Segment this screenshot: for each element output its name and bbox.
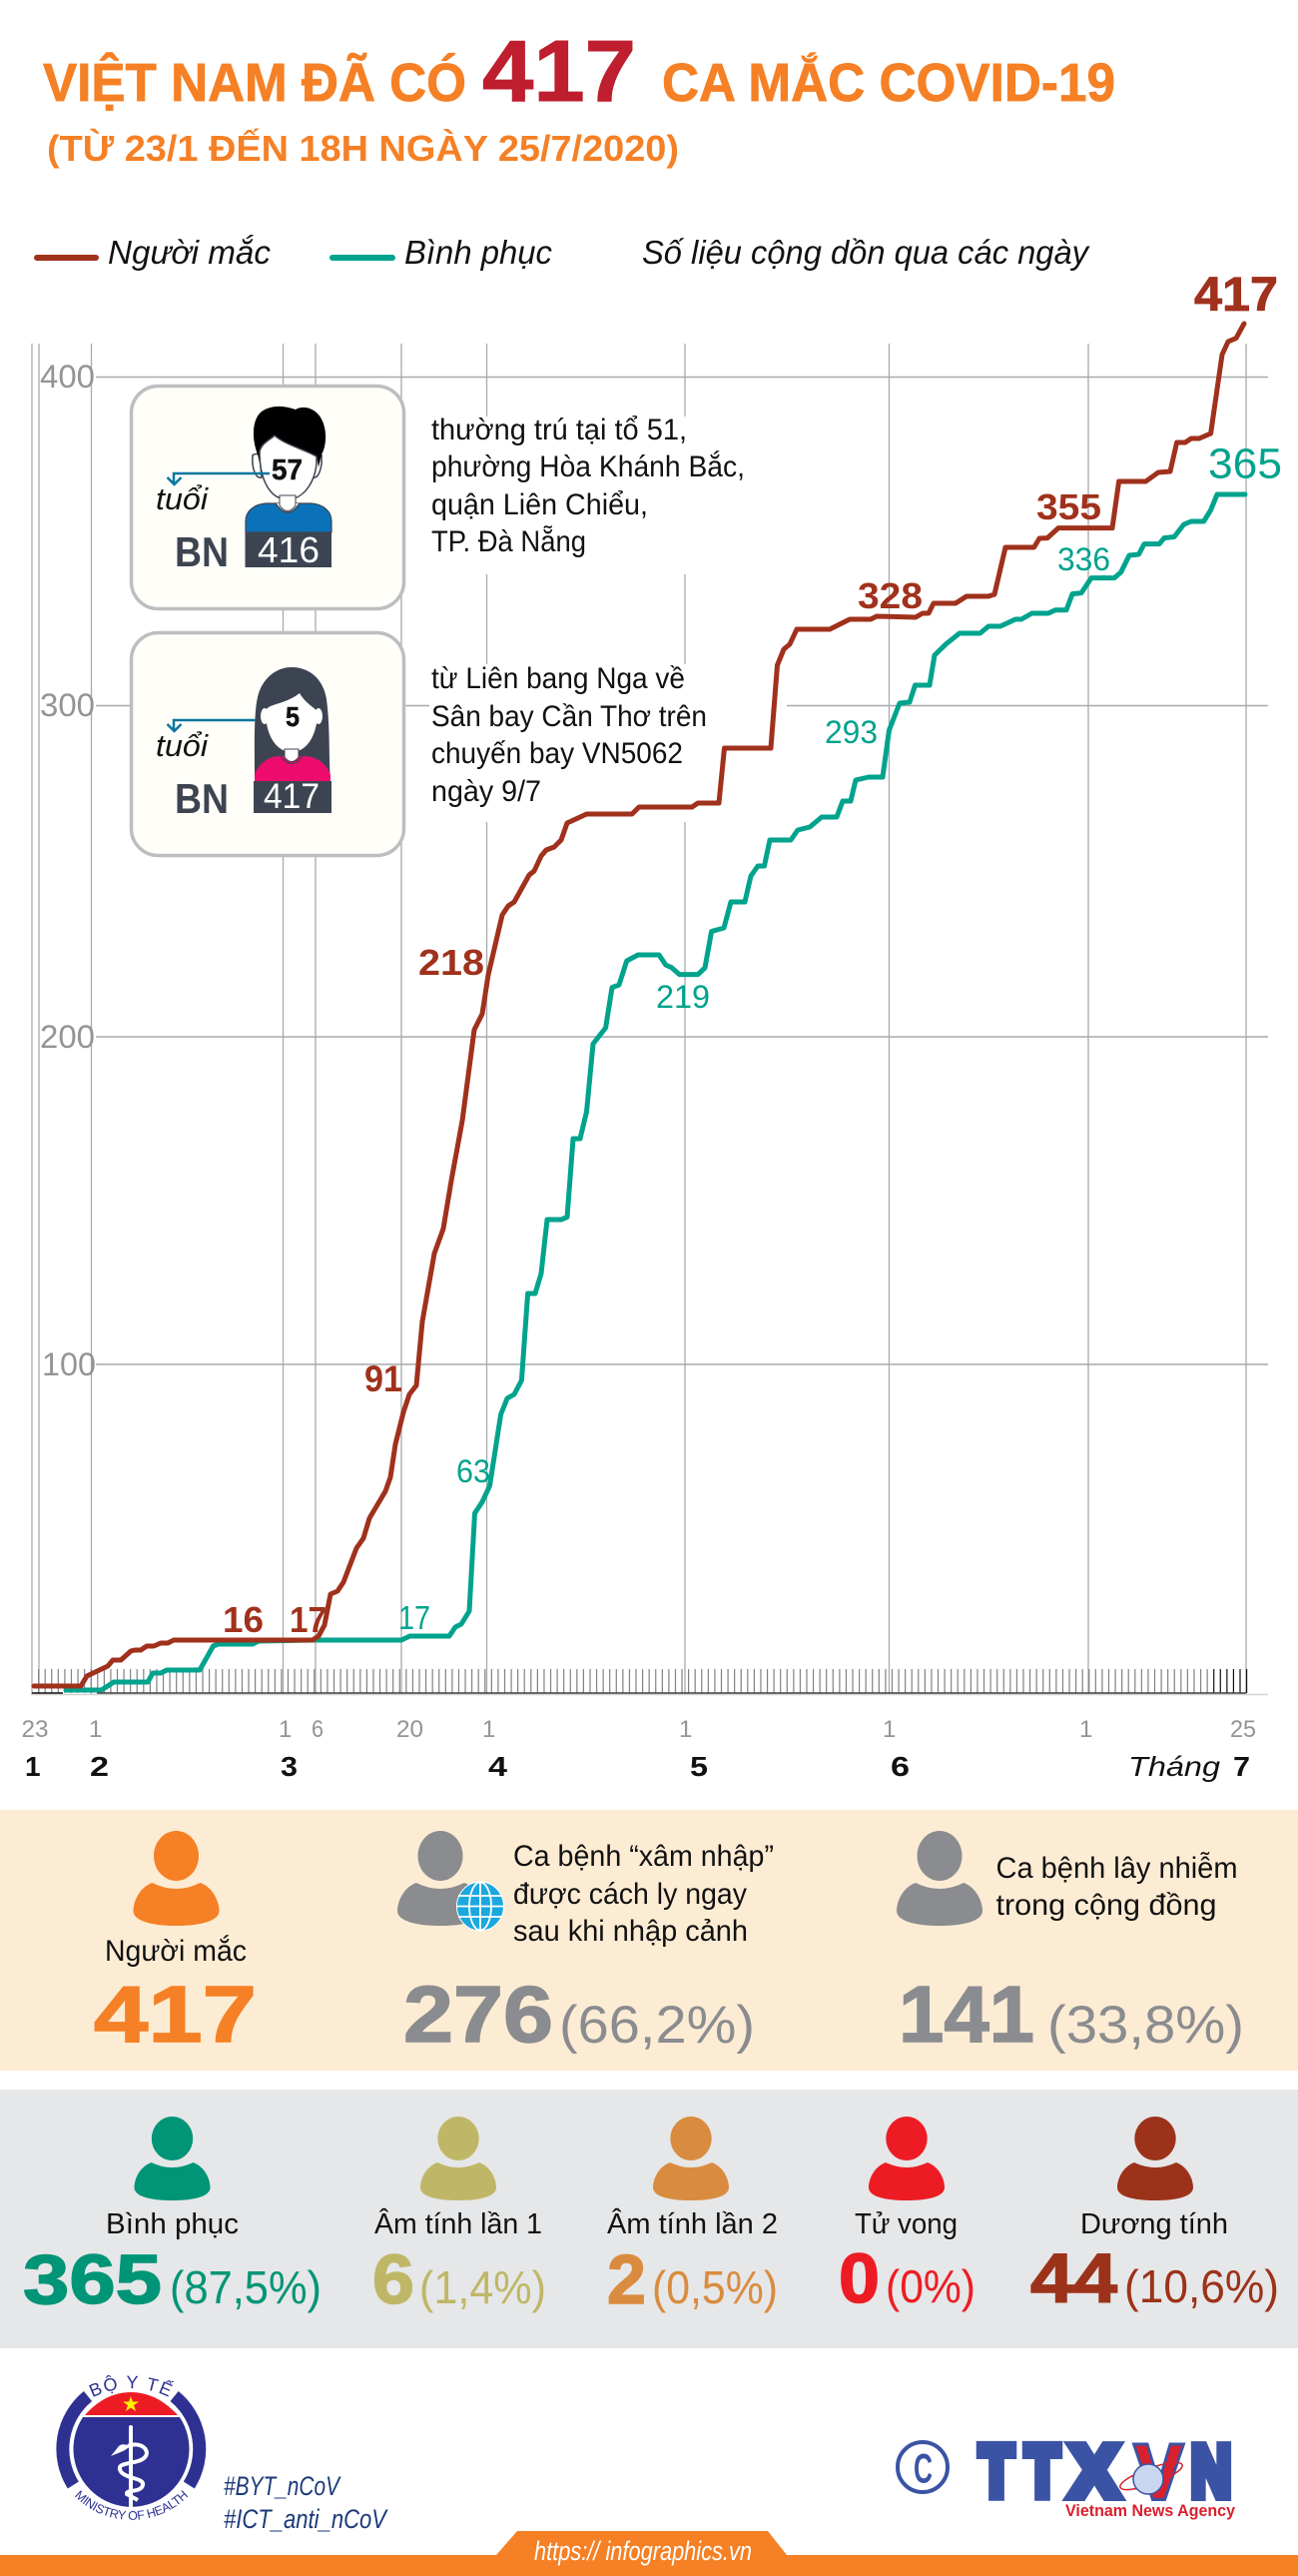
patient number 416 [246,529,331,570]
x axis month labels: 2 [90,1751,109,1782]
community cases description [996,1852,1238,1922]
arrow to age label [168,473,270,484]
imported count: (66,2%) [559,1996,755,2055]
y axis labels [40,359,96,1382]
confirmed value labels: 355 [1036,486,1101,527]
logo: TTXVN: Vietnam News Agency [1065,2501,1236,2520]
y axis labels: 200 [40,1019,95,1055]
title [43,23,1115,120]
logo: TTXVN: X [1070,2432,1118,2512]
confirmed value labels: 16 [223,1599,264,1640]
x axis day labels: 1 [89,1716,102,1743]
community cases description: Ca bệnh lây nhiễm [996,1852,1238,1885]
patient card BN 417 [132,633,403,855]
logo: TTXVN: T [1025,2432,1059,2512]
outcome: still positive: 44 [1030,2239,1117,2317]
note for BN 417: Sân bay Cần Thơ trên [431,700,707,733]
confirmed value labels: 417 [1194,269,1278,322]
icon: male patient [246,407,331,532]
confirmed value labels: 17 [290,1599,326,1640]
x axis month labels [25,1751,1250,1782]
footer bar [0,2531,1298,2576]
x axis day labels: 1 [279,1716,292,1743]
outcome: negative once: Âm tính lần 1 [374,2207,542,2240]
age 57: 57 [272,454,303,486]
x axis day labels: 1 [482,1716,495,1743]
outcome: deaths: 0 [839,2239,880,2317]
y axis labels: 400 [40,359,95,395]
recovered value labels: 63 [456,1453,490,1489]
imported cases description: Ca bệnh “xâm nhập” [513,1840,774,1873]
imported count: 276 [403,1970,553,2059]
logo: TTXVN: N [1191,2432,1231,2512]
community count: 141 [899,1970,1034,2059]
x axis day labels: 23 [22,1716,48,1743]
age unit: tuổi [156,481,209,516]
note for BN 416: thường trú tại tổ 51, [431,414,687,446]
outcome: negative twice: (0,5%) [652,2261,778,2313]
chart legend: Số liệu cộng dồn qua các ngày [642,234,1090,271]
title: 417 [482,23,636,120]
outcome: negative twice: Âm tính lần 2 [607,2207,778,2240]
outcome: deaths: (0%) [886,2260,975,2312]
total 417: 417 [94,1970,257,2059]
recovered value labels: 219 [656,979,710,1015]
recovered value labels: 17 [398,1599,430,1636]
logo: TTXVN: V [1135,2430,1182,2515]
age unit: tuổi [156,728,209,763]
patient number 416: 416 [258,529,320,570]
note for BN 417 [431,662,707,808]
x axis month labels: 6 [891,1751,910,1782]
x axis day labels: 1 [679,1716,692,1743]
outcome: deaths [839,2117,975,2317]
community count: (33,8%) [1047,1996,1244,2055]
hashtags: #BYT_nCoV [224,2471,341,2501]
logo: ministry of health [56,2375,206,2520]
outcome: negative once: (1,4%) [419,2261,546,2313]
confirmed value labels: 328 [858,575,923,616]
community cases description: trong cộng đồng [996,1889,1216,1922]
icon: person with globe [397,1831,503,1931]
logo: TTXVN [898,2430,1236,2520]
patient code BN: BN [175,528,229,575]
outcome: recovered [23,2117,322,2318]
outcome: recovered: (87,5%) [170,2261,322,2313]
y axis labels: 300 [40,687,95,723]
recovered value labels: 293 [825,714,878,750]
panel: outcomes [0,2090,1298,2348]
hashtags: #ICT_anti_nCoV [224,2504,388,2534]
imported cases description [513,1840,774,1948]
age 5: 5 [286,701,300,732]
white masks behind note text [429,417,787,822]
x axis month labels: 1 [25,1751,41,1782]
x axis day labels [22,1716,1256,1743]
patient card BN 416 [132,386,403,609]
outcome: negative once: 6 [372,2240,414,2318]
outcome: recovered: Bình phục [106,2208,239,2240]
x axis month labels: 7 [1233,1751,1250,1782]
outcome: still positive: Dương tính [1080,2208,1228,2240]
confirmed value labels [223,269,1278,1640]
outcome: still positive: (10,6%) [1124,2260,1279,2312]
chart legend [37,234,1090,271]
x axis month labels: 3 [281,1751,298,1782]
outcome: negative once [372,2117,546,2318]
patient number 417: 417 [264,777,320,816]
logo: ministry of health: BỘ Y TẾ [89,2375,174,2397]
note for BN 417: ngày 9/7 [431,775,541,808]
outcome: negative twice [607,2117,778,2318]
imported cases description: sau khi nhập cảnh [513,1915,748,1948]
recovered value labels: 365 [1208,440,1282,488]
outcome: recovered: 365 [23,2240,162,2318]
icon: person orange [134,1831,220,1926]
footer bar: https:// infographics.vn [534,2536,752,2566]
x axis day labels: 20 [396,1716,423,1743]
x axis day labels: 1 [883,1716,896,1743]
note for BN 416 [431,414,745,558]
confirmed cases line [34,324,1244,1686]
x axis day labels: 25 [1230,1716,1256,1743]
logo: ministry of health: MINISTRY OF HEALTH [75,2490,188,2520]
y axis labels: 100 [42,1346,96,1382]
panel: total cases [0,1810,1298,2071]
x axis day labels: 1 [1079,1716,1092,1743]
icon: female patient [255,667,330,781]
x axis month labels: Tháng [1128,1751,1220,1782]
confirmed value labels: 218 [418,942,484,983]
logo: TTXVN: T [979,2432,1013,2512]
subtitle: (TỪ 23/1 ĐẾN 18H NGÀY 25/7/2020) [47,127,679,169]
outcome: negative twice: 2 [607,2240,646,2318]
icon: person grey [897,1831,982,1926]
note for BN 416: TP. Đà Nẵng [431,525,586,558]
recovered value labels: 336 [1057,541,1110,577]
title: VIỆT NAM ĐÃ CÓ [43,52,466,113]
imported cases description: được cách ly ngay [513,1878,747,1911]
label: infected: Người mắc [105,1935,247,1968]
outcome: still positive [1030,2117,1279,2317]
patient code BN: BN [175,775,229,822]
x axis ticks [32,1681,1268,1694]
arrow to age label [168,720,256,731]
note for BN 416: phường Hòa Khánh Bắc, [431,450,745,483]
x axis month labels: 5 [690,1751,708,1782]
outcome: deaths: Tử vong [855,2208,958,2240]
community count [899,1970,1244,2059]
x axis month labels: 4 [488,1751,508,1782]
note for BN 417: chuyến bay VN5062 [431,737,683,770]
chart gridlines [32,344,1268,1695]
logo: TTXVN: C [914,2445,933,2491]
note for BN 416: quận Liên Chiểu, [431,488,648,521]
note for BN 417: từ Liên bang Nga về [431,662,685,695]
hashtags [224,2471,388,2534]
chart legend: Người mắc [108,234,272,271]
x axis day labels: 6 [312,1716,324,1743]
title: CA MẮC COVID-19 [662,52,1115,113]
recovered line [66,494,1245,1690]
imported count [403,1970,755,2059]
recovered value labels [398,440,1282,1636]
chart legend: Bình phục [404,234,552,271]
confirmed value labels: 91 [364,1358,402,1399]
